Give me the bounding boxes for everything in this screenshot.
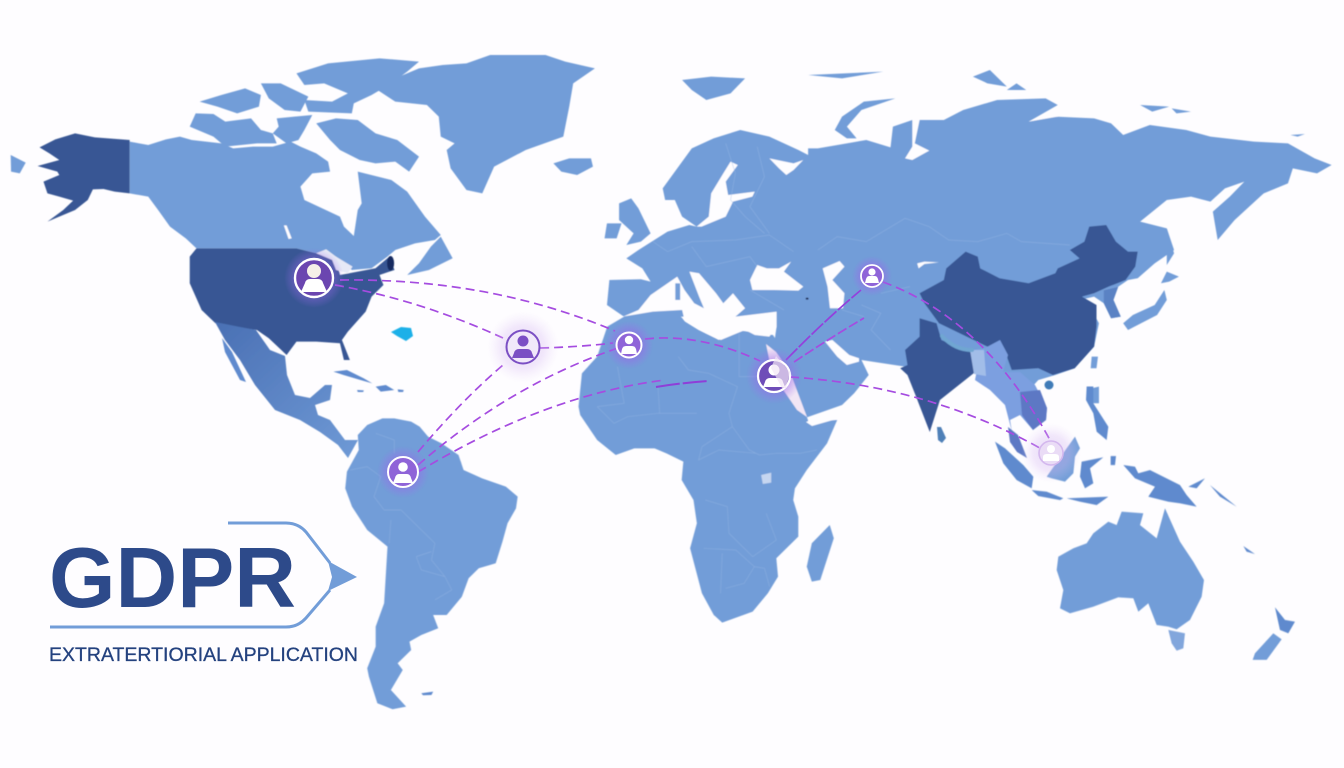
line: brazil to ocean node — [418, 365, 503, 452]
sea: gulf of aden — [806, 408, 848, 426]
sea: red sea — [766, 344, 807, 417]
south atlantic group — [333, 310, 837, 709]
islands: europe — [605, 72, 895, 300]
landmass: eurasia — [607, 98, 1332, 417]
logo: gdpr — [49, 523, 358, 666]
lake: winnipeg — [284, 225, 292, 239]
node: sudan — [746, 348, 802, 404]
landmass: greenland — [378, 55, 595, 193]
bangladesh light wash — [970, 350, 986, 376]
country: alaska — [38, 133, 130, 222]
eurasia group — [605, 70, 1332, 432]
island: sri lanka — [937, 427, 946, 443]
line: brazil to africa — [418, 380, 665, 472]
small dark point — [806, 298, 809, 300]
line: africa thick segment — [656, 381, 709, 387]
node: usa — [284, 248, 344, 308]
line: ocean node to morocco — [540, 343, 613, 348]
landmass: canada — [130, 137, 441, 270]
islands: falklands — [421, 692, 433, 695]
oceania group — [995, 387, 1295, 660]
vietnam region — [1020, 390, 1047, 430]
node: malaysia — [1021, 423, 1081, 483]
country: india — [900, 318, 1004, 432]
borders: africa and south america — [350, 333, 817, 600]
islands: canadian arctic — [11, 58, 453, 275]
logo heading: GDPR — [49, 531, 296, 626]
teal streak — [942, 336, 972, 350]
red sea over node — [771, 356, 790, 388]
island: tasmania — [1168, 630, 1185, 651]
country: mexico and central america — [215, 322, 358, 458]
maine dark marker — [387, 256, 394, 271]
cyan marker — [391, 327, 413, 341]
mainland southeast asia — [972, 340, 1047, 432]
node: morocco — [605, 321, 653, 369]
node: kazakhstan — [852, 256, 892, 296]
country: korea — [1104, 287, 1121, 318]
connection lines — [335, 280, 1050, 472]
line: kazakhstan to malaysia — [883, 282, 1050, 440]
islands: caribbean — [333, 370, 404, 392]
line: sudan to malaysia — [790, 377, 1045, 451]
seas: mediterranean — [623, 272, 777, 340]
island: new caledonia — [1243, 546, 1255, 554]
country: united states — [190, 248, 395, 360]
island: iceland — [553, 158, 593, 175]
landmass: south america — [345, 418, 518, 709]
landmass: australia — [1057, 508, 1204, 629]
islands: new zealand — [1253, 607, 1295, 660]
borders: eurasia — [653, 143, 1070, 350]
baja california — [222, 338, 246, 382]
malay peninsula — [1008, 427, 1027, 458]
line: brazil to morocco — [418, 348, 618, 465]
line: morocco to sudan — [645, 338, 760, 361]
north america group — [11, 55, 595, 360]
line: usa to morocco — [340, 280, 615, 331]
line: sudan to iran — [794, 318, 864, 362]
logo frame arrow — [50, 523, 357, 627]
seas: black, caspian, persian gulf, baltic, white, aral, ob — [697, 112, 1058, 365]
country: china — [920, 225, 1138, 375]
islands: indonesia and philippines — [995, 387, 1237, 507]
great lakes — [316, 249, 353, 273]
island: madagascar — [807, 525, 834, 582]
line: sudan to kazakhstan — [786, 290, 861, 360]
lake victoria — [761, 473, 771, 484]
logo subtitle: EXTRATERTIORIAL APPLICATION — [49, 644, 358, 666]
islands: russia arctic and pacific — [973, 70, 1305, 403]
node: brazil — [377, 446, 429, 498]
landmass: africa — [579, 310, 837, 623]
island: hainan — [1044, 380, 1054, 390]
line: usa to ocean node — [335, 285, 503, 338]
node: ocean — [487, 311, 559, 383]
